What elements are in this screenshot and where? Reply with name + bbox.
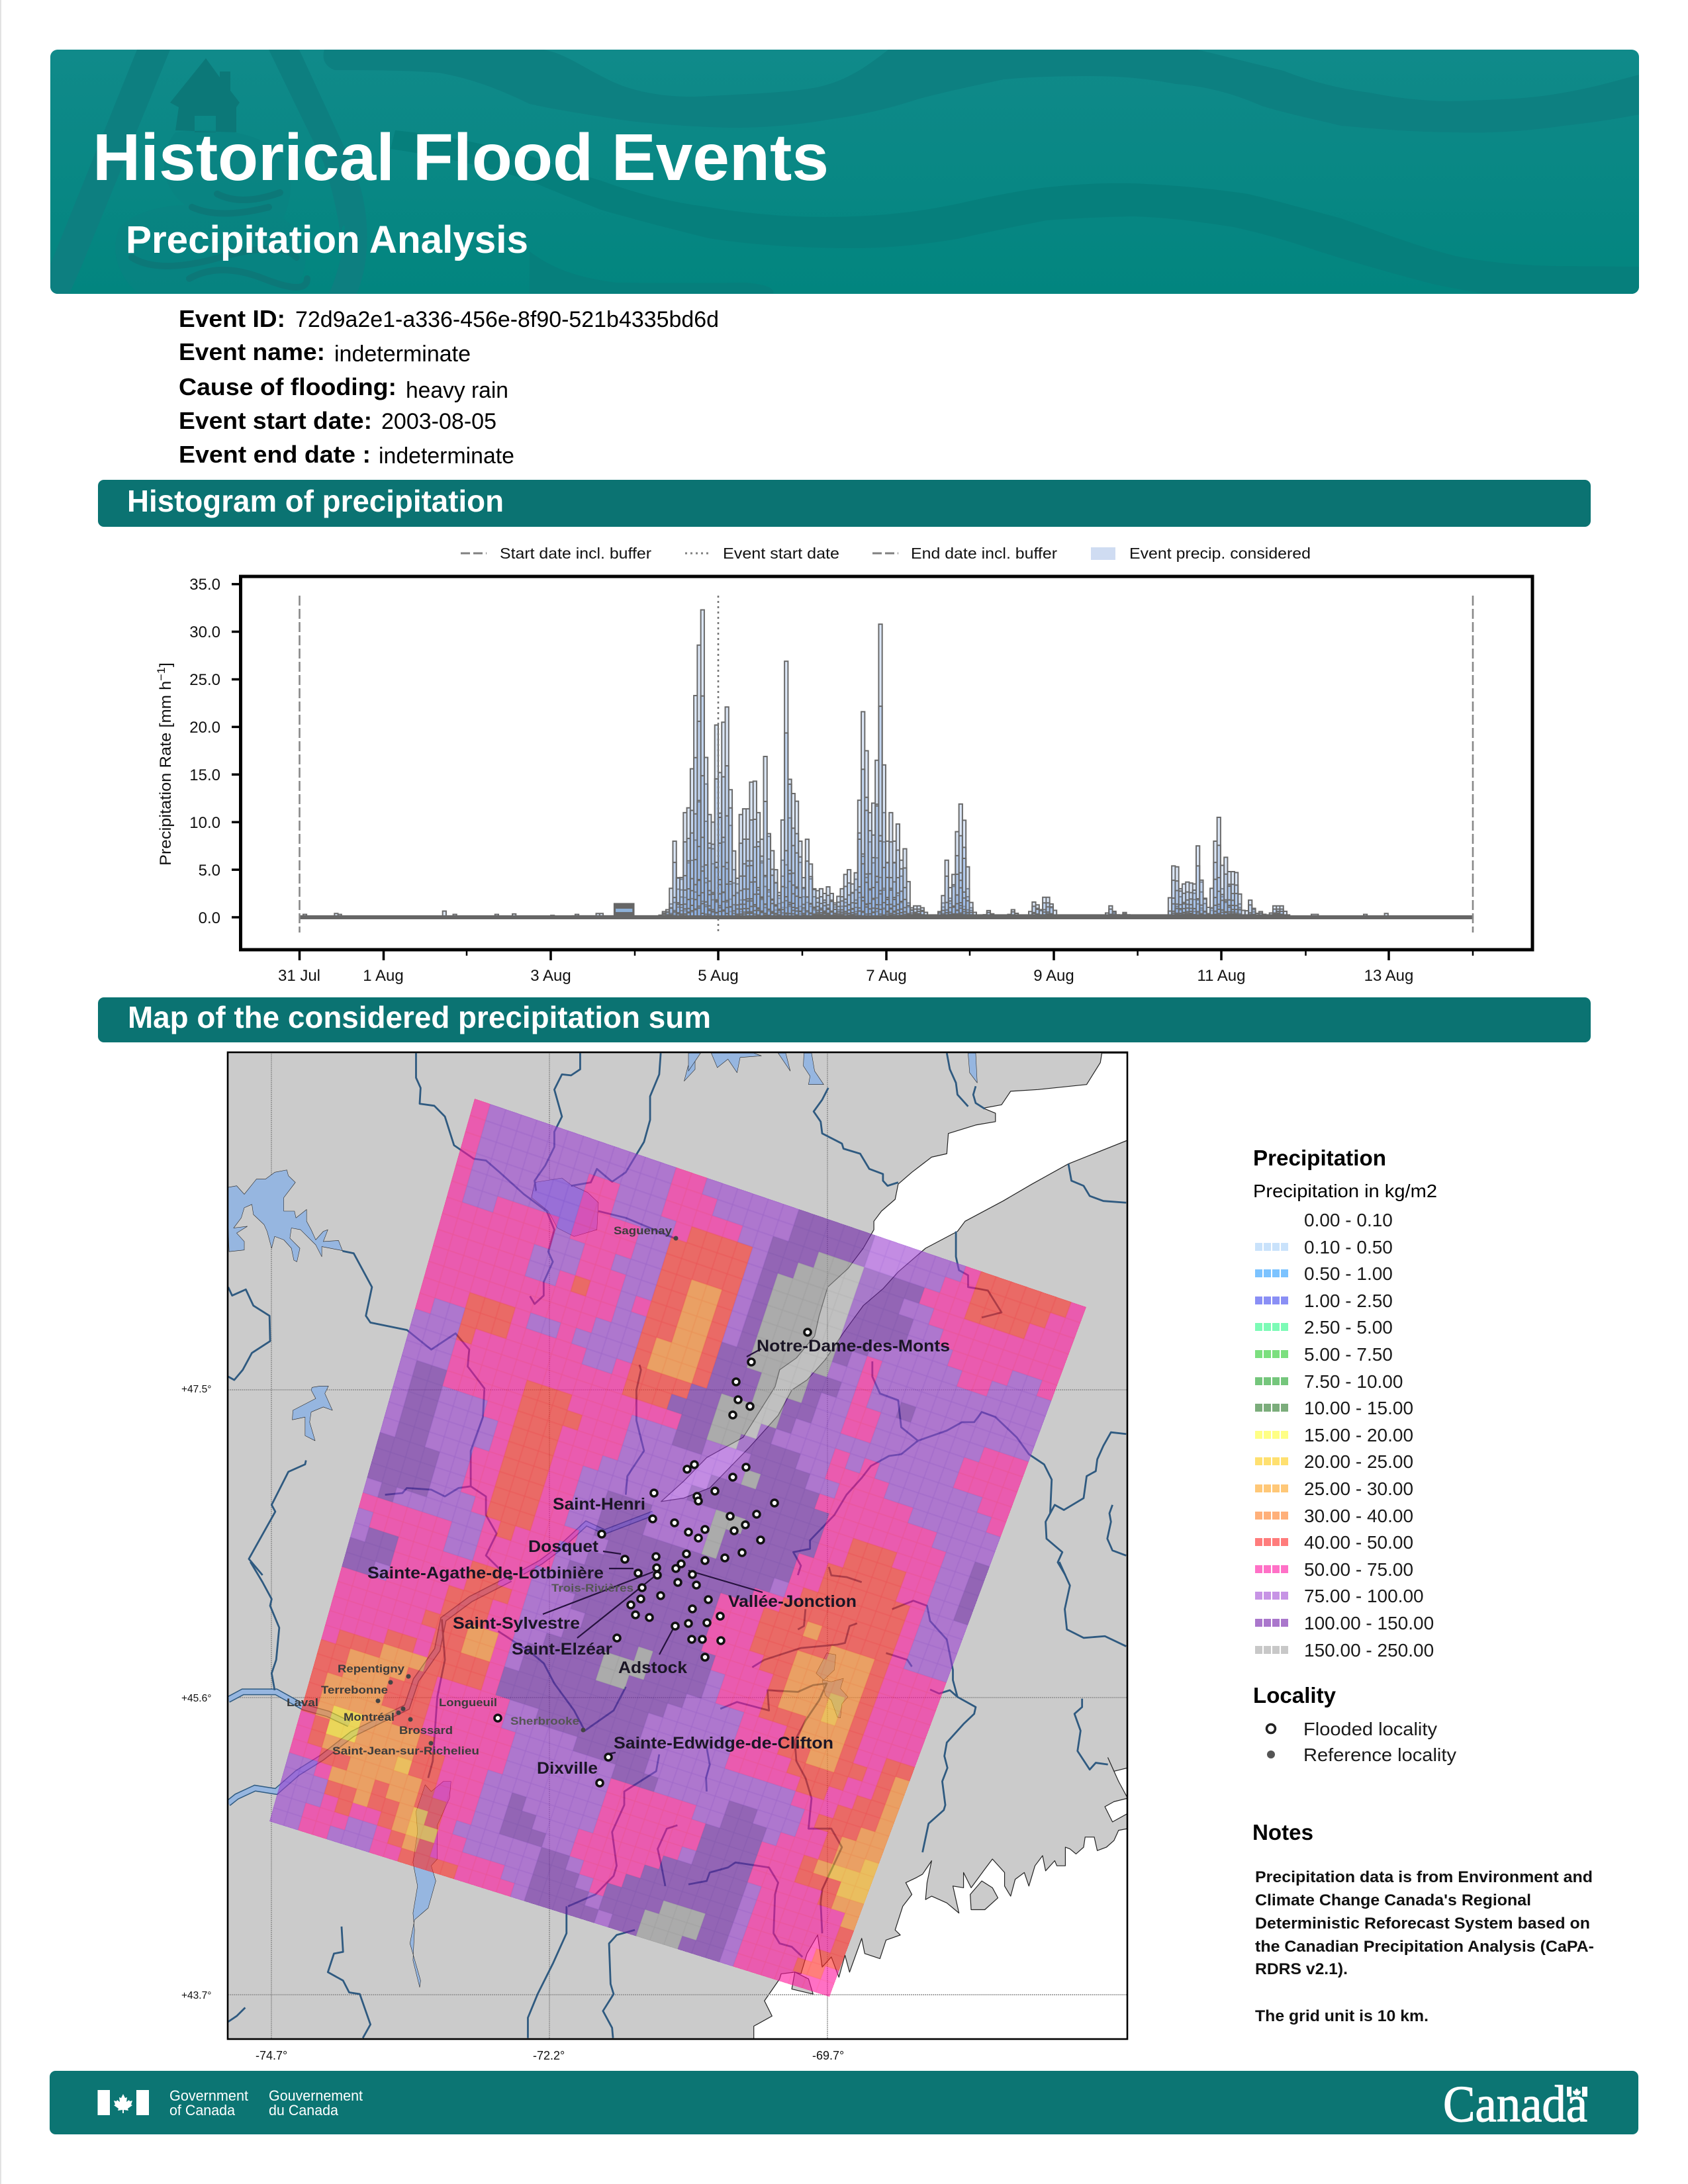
precipitation legend: 25.00 - 30.00 (1304, 1479, 1413, 1499)
y axis labels: 5.0 (199, 862, 220, 880)
flooded locality labels: Dosquet (528, 1537, 599, 1556)
reference locality labels: Laval (287, 1696, 318, 1709)
subtitle: Precipitation Analysis (126, 218, 528, 261)
x axis labels: 9 Aug (1033, 967, 1074, 985)
section heading: histogram: Histogram of precipitation (127, 484, 504, 518)
icon: house (170, 58, 240, 132)
reference locality labels: Repentigny (338, 1662, 405, 1675)
reference locality labels: Longueuil (439, 1696, 497, 1709)
event details: 2003-08-05 (381, 409, 496, 434)
axis ticks (232, 584, 1389, 960)
notes: Deterministic Reforecast System based on (1255, 1915, 1590, 1933)
icon: government of canada flag (98, 2090, 149, 2115)
y axis title: −1 (155, 667, 167, 681)
event details: heavy rain (406, 378, 508, 403)
buffer and event date lines (299, 596, 1473, 933)
precipitation legend (1253, 1146, 1437, 1661)
canada wordmark: Canada (1443, 2075, 1587, 2132)
title: Historical Flood Events (93, 120, 829, 195)
rivers south-west (228, 1562, 677, 2038)
flooded locality labels: Adstock (618, 1659, 687, 1677)
flooded locality markers (494, 1329, 811, 1786)
y axis labels: 35.0 (189, 576, 220, 594)
map base: land, water, rivers (228, 1052, 1128, 2045)
event details: Cause of flooding: (179, 373, 397, 400)
event details: Event end date : (179, 441, 371, 468)
section heading: map: Map of the considered precipitation sum (128, 1000, 711, 1034)
event details (179, 305, 719, 469)
government signature: Gouvernement (269, 2087, 363, 2104)
precipitation legend: 1.00 - 2.50 (1304, 1291, 1393, 1311)
y axis labels: 10.0 (189, 814, 220, 832)
precipitation legend: 0.50 - 1.00 (1304, 1263, 1393, 1284)
event details: Event ID: (179, 305, 285, 332)
x axis labels: 5 Aug (698, 967, 739, 985)
reference locality labels: Saint-Jean-sur-Richelieu (332, 1745, 479, 1757)
flooded locality labels: Saint-Sylvestre (453, 1614, 580, 1633)
reference locality labels: Sherbrooke (510, 1715, 579, 1727)
event details: 72d9a2e1-a336-456e-8f90-521b4335bd6d (295, 307, 719, 332)
graticule (228, 1052, 1127, 2039)
locality legend: Locality (1253, 1683, 1336, 1707)
locality legend (1253, 1683, 1456, 1765)
lakes (228, 1053, 977, 1987)
y axis labels: 20.0 (189, 719, 220, 737)
precipitation legend: 7.50 - 10.00 (1304, 1371, 1403, 1392)
precipitation legend: 50.00 - 75.00 (1304, 1559, 1413, 1580)
notes: RDRS v2.1). (1255, 1960, 1348, 1978)
chart legend (461, 545, 1311, 562)
large rivers (228, 1579, 510, 1803)
section heading: map (98, 997, 1591, 1042)
precipitation legend: 2.50 - 5.00 (1304, 1317, 1393, 1338)
longitude labels: -72.2° (533, 2049, 565, 2062)
precipitation legend: Precipitation (1253, 1146, 1386, 1170)
latitude labels: +45.6° (181, 1693, 211, 1704)
flooded locality labels: Sainte-Edwidge-de-Clifton (614, 1734, 833, 1752)
notes (1252, 1820, 1594, 2025)
event details: indeterminate (334, 341, 471, 367)
estuary (661, 1053, 1128, 1502)
notes: Notes (1252, 1820, 1313, 1844)
y axis title: Precipitation Rate [mm h (157, 692, 175, 866)
precipitation legend: Precipitation in kg/m2 (1253, 1181, 1437, 1201)
longitude labels: -74.7° (256, 2049, 287, 2062)
locality legend: Flooded locality (1303, 1719, 1437, 1739)
longitude labels (256, 2049, 844, 2062)
rivers south-east (688, 1562, 1126, 1957)
precipitation legend: 30.00 - 40.00 (1304, 1506, 1413, 1526)
precipitation legend: 10.00 - 15.00 (1304, 1398, 1413, 1418)
rivers north-east (793, 1053, 1126, 1575)
chart legend: Event start date (723, 545, 839, 562)
government signature: du Canada (269, 2102, 339, 2118)
longitude labels: -69.7° (812, 2049, 844, 2062)
plot frame (241, 576, 1532, 950)
locality legend: Reference locality (1303, 1745, 1456, 1765)
chart legend: Event precip. considered (1129, 545, 1311, 562)
event details: Event name: (179, 338, 325, 365)
y axis labels: 25.0 (189, 671, 220, 689)
y axis labels: 0.0 (199, 909, 220, 927)
notes: The grid unit is 10 km. (1255, 2007, 1429, 2025)
x axis labels: 1 Aug (363, 967, 404, 985)
government signature (169, 2087, 363, 2118)
section heading: histogram (98, 480, 1591, 527)
flooded locality labels: Notre-Dame-des-Monts (757, 1337, 950, 1355)
event details: Event start date: (179, 407, 372, 434)
y axis labels: 30.0 (189, 623, 220, 641)
precipitation legend: 0.00 - 0.10 (1304, 1210, 1393, 1230)
precipitation bars (303, 610, 1388, 917)
leader lines (543, 1349, 763, 1754)
precipitation legend: 5.00 - 7.50 (1304, 1344, 1393, 1365)
reference locality labels (287, 1224, 673, 1757)
notes: the Canadian Precipitation Analysis (CaPA- (1255, 1938, 1594, 1956)
flooded locality labels: Vallée-Jonction (728, 1592, 857, 1611)
chart legend: End date incl. buffer (911, 545, 1057, 562)
precipitation legend: 75.00 - 100.00 (1304, 1586, 1424, 1606)
precipitation legend: 20.00 - 25.00 (1304, 1451, 1413, 1472)
event details: indeterminate (379, 443, 514, 469)
y axis title: ] (157, 662, 175, 667)
flooded locality labels: Sainte-Agathe-de-Lotbinière (367, 1564, 604, 1582)
reference locality labels: Saguenay (614, 1224, 673, 1237)
x axis labels: 13 Aug (1364, 967, 1413, 985)
x axis labels: 31 Jul (278, 967, 320, 985)
reference locality labels: Montréal (344, 1711, 395, 1723)
reference locality labels: Brossard (399, 1724, 453, 1737)
notes: Precipitation data is from Environment and (1255, 1868, 1593, 1886)
latitude labels: +43.7° (181, 1990, 211, 2001)
precipitation legend: 15.00 - 20.00 (1304, 1425, 1413, 1445)
flooded locality labels (367, 1337, 950, 1778)
footer (50, 2071, 1638, 2134)
x axis labels (278, 967, 1413, 985)
reference locality markers (376, 1236, 678, 1746)
map frame (228, 1052, 1127, 2039)
latitude labels: +47.5° (181, 1384, 211, 1395)
chart legend: Start date incl. buffer (500, 545, 651, 562)
government signature: of Canada (169, 2102, 236, 2118)
notes: Climate Change Canada's Regional (1255, 1891, 1531, 1909)
x axis labels: 7 Aug (866, 967, 907, 985)
rivers north-west (228, 1053, 675, 1575)
x axis labels: 3 Aug (530, 967, 571, 985)
baseline (299, 915, 1473, 919)
header banner (50, 50, 1639, 294)
map: precipitation grid (269, 1099, 1086, 1997)
y axis labels (189, 576, 220, 927)
precipitation legend: 0.10 - 0.50 (1304, 1237, 1393, 1257)
histogram chart (155, 576, 1532, 985)
latitude labels (181, 1384, 211, 2001)
y axis labels: 15.0 (189, 766, 220, 784)
precipitation legend: 150.00 - 250.00 (1304, 1640, 1434, 1661)
precipitation legend: 100.00 - 150.00 (1304, 1613, 1434, 1633)
x axis labels: 11 Aug (1197, 967, 1245, 985)
ocean (754, 1829, 1128, 2045)
flooded locality labels: Saint-Henri (553, 1495, 645, 1514)
government signature: Government (169, 2087, 248, 2104)
precipitation legend: 40.00 - 50.00 (1304, 1532, 1413, 1553)
reference locality labels: Trois-Rivières (551, 1582, 633, 1594)
flooded locality labels: Saint-Elzéar (512, 1640, 612, 1659)
flooded locality labels: Dixville (537, 1759, 598, 1778)
reference locality labels: Terrebonne (321, 1684, 388, 1696)
